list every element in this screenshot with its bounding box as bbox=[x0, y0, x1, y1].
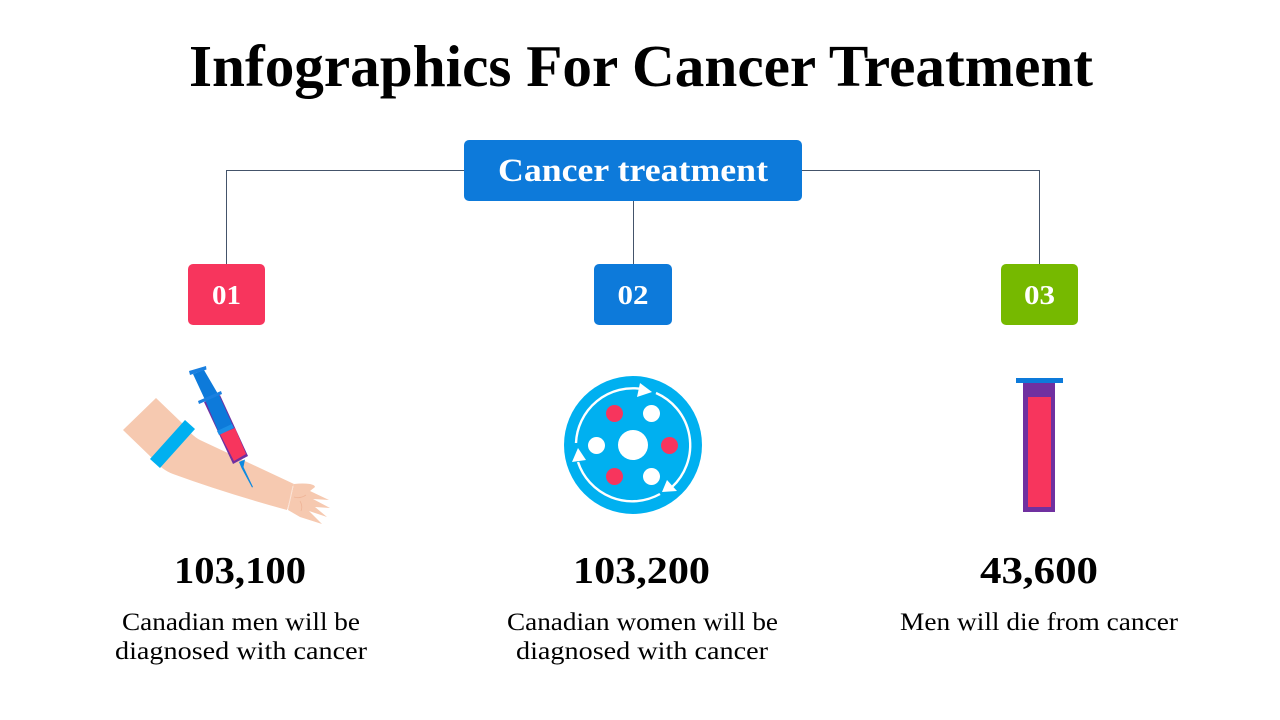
cycle arrows bbox=[576, 388, 690, 501]
text: men die: Men will die from cancer bbox=[900, 609, 1179, 636]
badge 02 bbox=[594, 264, 672, 325]
icon: test tube bbox=[1016, 378, 1063, 512]
text: women diagnosed bbox=[507, 609, 778, 665]
arm band bbox=[150, 420, 195, 468]
title: Infographics For Cancer Treatment bbox=[189, 33, 1093, 99]
stat: 103,100: 103,100 bbox=[174, 550, 306, 592]
text: men diagnosed: diagnosed with cancer bbox=[115, 638, 368, 665]
badge 01: 01 bbox=[212, 280, 241, 310]
arm bbox=[123, 398, 294, 510]
stat: 43,600: 43,600 bbox=[980, 550, 1098, 592]
syringe barrel bbox=[204, 395, 248, 464]
badge 03 bbox=[1001, 264, 1078, 325]
text: men diagnosed: Canadian men will be bbox=[122, 609, 360, 636]
badge 03: 03 bbox=[1024, 280, 1055, 310]
icon: arm with syringe bbox=[123, 366, 330, 524]
text: men diagnosed bbox=[115, 609, 368, 665]
syringe needle bbox=[239, 460, 253, 488]
heading box: Cancer treatment: Cancer treatment bbox=[498, 153, 768, 189]
stat: 103,200: 103,200 bbox=[573, 550, 710, 592]
syringe blood bbox=[220, 428, 246, 461]
hand bbox=[288, 484, 330, 524]
cell dots bbox=[618, 430, 648, 460]
badge 02: 02 bbox=[618, 280, 648, 310]
icon: cell circle bbox=[564, 376, 702, 514]
text: women diagnosed: Canadian women will be bbox=[507, 609, 778, 636]
heading box: Cancer treatment bbox=[464, 140, 802, 201]
text: women diagnosed: diagnosed with cancer bbox=[516, 638, 769, 665]
syringe plunger bbox=[193, 370, 233, 433]
badge 01 bbox=[188, 264, 265, 325]
